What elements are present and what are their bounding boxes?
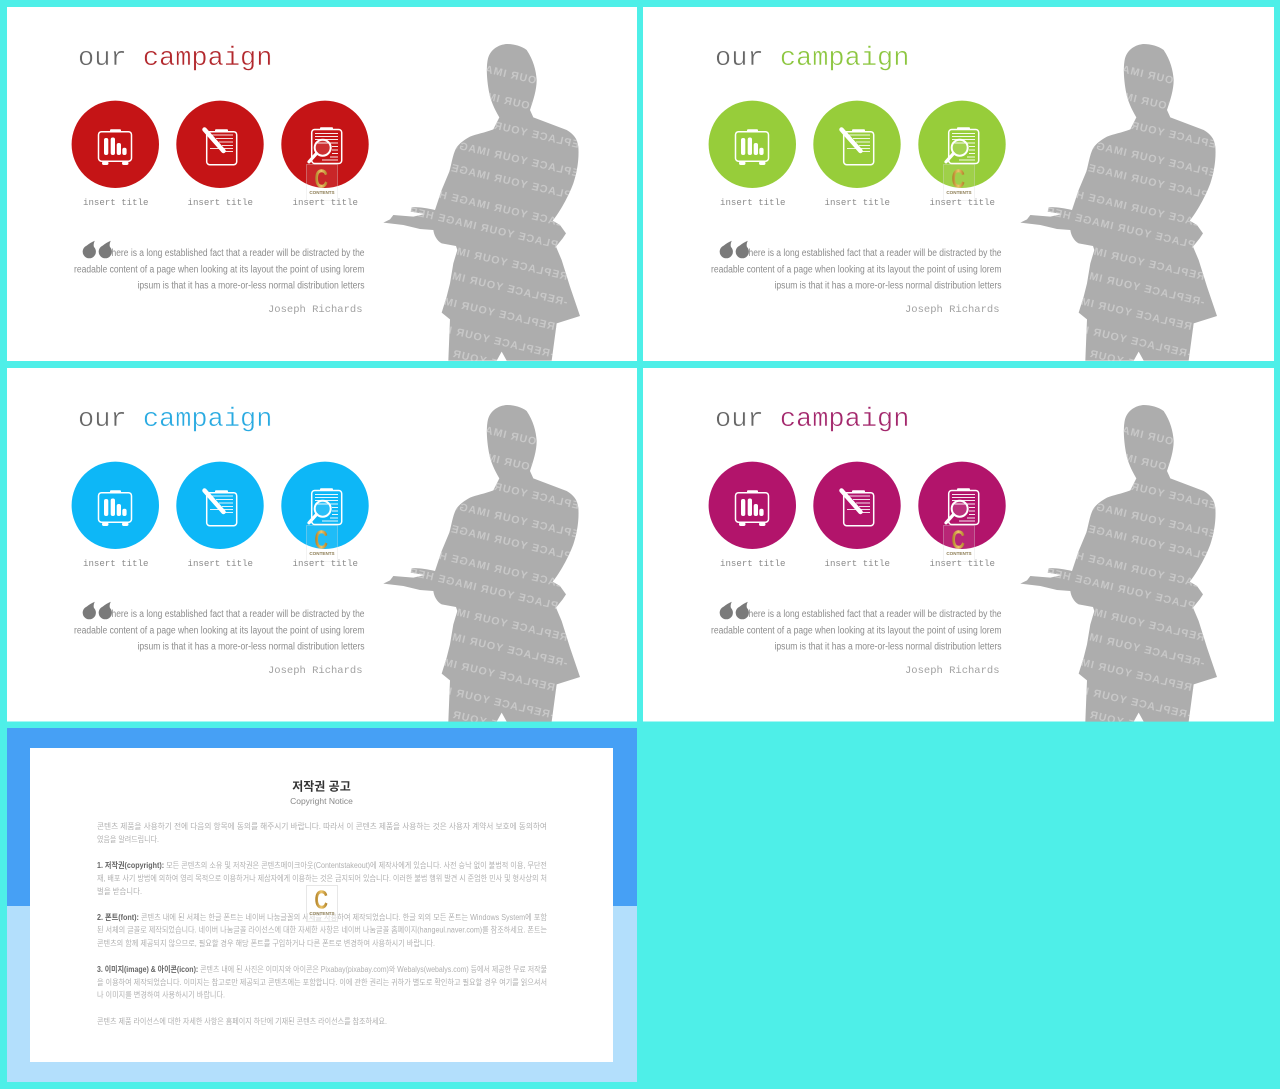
silhouette image placeholder: REPLACE YOUR IMAGE HERE	[1030, 592, 1206, 644]
icon: clipboard with pencil	[813, 101, 901, 188]
silhouette image placeholder: REPLACE YOUR IMAGE HERE	[1036, 564, 1212, 616]
section 1: copyright: 1. 저작권(copyright): 모든 콘텐츠의 소유 및 저작권은 콘텐츠메이크아웃(Contentstakeout)에 제작사에게 있습니다. 사전 승낙 없이 불법적 이용, 무단전	[97, 860, 547, 870]
icon: clipboard with magnifier	[918, 101, 1006, 188]
icon: clipboard with magnifier	[281, 462, 369, 549]
quote text	[74, 609, 365, 652]
icon: presentation board	[709, 462, 796, 549]
silhouette image placeholder: REPLACE YOUR IMAGE HERE	[1050, 154, 1226, 205]
title: our campaign	[715, 405, 909, 435]
copyright subheading: Copyright Notice	[290, 796, 353, 806]
silhouette image placeholder: -REPLACE YOUR IMAGE HERE	[1025, 617, 1206, 670]
title: our campaign	[78, 44, 272, 74]
quote author: Joseph Richards	[268, 304, 363, 316]
label: third insert title: insert title	[292, 197, 358, 208]
quote text: readable content of a page when looking at its layout the point of using lorem	[711, 626, 1002, 636]
watermark	[306, 884, 338, 922]
silhouette image placeholder: -REPLACE YOUR IMAGE HERE	[1017, 642, 1197, 695]
quote text: here is a long established fact that a reader will be distracted by the	[748, 609, 1002, 620]
quote text: ipsum is that it has a more-or-less normal distribution letters	[774, 280, 1002, 292]
watermark: CONTENTS	[309, 551, 335, 556]
label: first insert title: insert title	[83, 558, 148, 569]
intro paragraph: 였음을 알려드립니다.	[97, 834, 159, 844]
watermark: C	[314, 884, 328, 914]
silhouette image placeholder	[1020, 44, 1217, 361]
watermark: CONTENTS	[309, 190, 335, 195]
section 3: image and icon: 3. 이미지(image) & 아이콘(icon): 콘텐츠 내에 된 사진은 이미지와 아이콘은 Pixabay(pixabay.com)와 Webalys(webalys.com) 등에서 제공한 무료 저작물	[97, 964, 547, 974]
icon: quotation marks	[720, 602, 749, 619]
quote text	[74, 248, 365, 292]
label: third insert title: insert title	[930, 197, 995, 208]
silhouette image placeholder: REPLACE YOUR IMAGE HERE	[1066, 51, 1242, 103]
silhouette image placeholder: REPLACE YOUR IMAGE HERE	[1036, 203, 1212, 255]
section 2: font: 된 서체의 글꼴로 제작되었습니다. 네이버 나눔글꼴 라이선스에 대한 자세한 사항은 네이버 나눔글꼴 홈페이지(hangeul.naver.com)를 참조하세요. 폰트는	[97, 924, 547, 934]
section 2: font: 2. 폰트(font): 콘텐츠 내에 된 서체는 한글 폰트는 네이버 나눔글꼴의 서체를 사용하여 제작되었습니다. 한글 외의 모든 폰트는 Windows System에 포함	[97, 912, 548, 922]
icon: presentation board	[709, 101, 796, 188]
section 3: image and icon	[97, 964, 547, 1000]
watermark: CONTENTS	[309, 911, 335, 916]
label: first insert title: insert title	[83, 197, 148, 208]
silhouette image placeholder: REPLACE YOUR IMAGE HERE	[413, 101, 589, 153]
silhouette image placeholder: REPLACE YOUR IMAGE HERE	[1050, 183, 1226, 235]
silhouette image placeholder: REPLACE YOUR IMAGE HERE	[1050, 101, 1226, 153]
silhouette image placeholder: -REPLACE YOUR IMAGE HERE	[375, 308, 555, 361]
quote text: here is a long established fact that a reader will be distracted by the	[748, 248, 1002, 259]
section 1: copyright: 재, 배포 사기 방법에 의하여 영리 목적으로 이용하거나 제삼자에게 이용하는 것은 금지되어 있습니다. 이러한 불법 행위 발견 시 준엄한 민사 및 형사상의 처	[97, 873, 547, 883]
silhouette image placeholder: REPLACE YOUR IMAGE HERE	[1050, 544, 1226, 596]
silhouette image placeholder: REPLACE YOUR IMAGE HERE	[1050, 462, 1226, 514]
section 1: copyright	[97, 860, 547, 896]
watermark	[944, 163, 974, 200]
panel: red campaign slide	[7, 7, 637, 382]
title: our campaign	[715, 44, 909, 74]
silhouette image placeholder: -REPLACE YOUR IMAGE HERE	[1009, 330, 1189, 382]
quote author: Joseph Richards	[905, 304, 1000, 316]
section 3: image and icon: 을 이용하여 제작되었습니다. 이미지는 참고로만 제공되고 콘텐츠에는 포함합니다. 이에 관한 권리는 귀하가 별도로 확인하고 필요할 경우 여기를 읽으셔서	[97, 977, 547, 987]
silhouette image placeholder: -REPLACE YOUR IMAGE HERE	[388, 617, 569, 670]
label: third insert title: insert title	[930, 558, 995, 569]
silhouette image placeholder: -REPLACE YOUR IMAGE HERE	[380, 281, 560, 334]
silhouette image placeholder: REPLACE YOUR IMAGE HERE	[413, 462, 589, 514]
icon: quotation marks	[83, 602, 112, 619]
panel: blue campaign slide	[7, 368, 637, 743]
silhouette image placeholder: -REPLACE YOUR IMAGE HERE	[372, 691, 552, 743]
copyright heading: 저작권 공고	[292, 778, 351, 794]
silhouette image placeholder	[1020, 405, 1217, 722]
watermark: CONTENTS	[946, 190, 972, 195]
silhouette image placeholder: -REPLACE YOUR IMAGE HERE	[375, 669, 555, 722]
quote author: Joseph Richards	[268, 665, 363, 677]
label: third insert title: insert title	[292, 558, 358, 569]
icon: clipboard with magnifier	[281, 101, 369, 188]
silhouette image placeholder: -REPLACE YOUR IMAGE HERE	[1025, 256, 1206, 309]
silhouette image placeholder: REPLACE YOUR IMAGE HERE	[413, 491, 589, 543]
panel: green campaign slide	[643, 7, 1274, 382]
icon: clipboard with pencil	[176, 101, 264, 188]
label: second insert title: insert title	[824, 558, 890, 569]
icon: presentation board	[72, 462, 159, 549]
silhouette image placeholder: -REPLACE YOUR IMAGE HERE	[1017, 281, 1197, 334]
quote text: readable content of a page when looking at its layout the point of using lorem	[711, 264, 1002, 276]
watermark	[306, 524, 338, 562]
quote text	[711, 248, 1002, 292]
icon: clipboard with pencil	[813, 462, 901, 549]
silhouette image placeholder: REPLACE YOUR IMAGE HERE	[399, 203, 575, 255]
label: second insert title: insert title	[824, 197, 890, 208]
quote text: ipsum is that it has a more-or-less normal distribution letters	[774, 642, 1002, 652]
icon: quotation marks	[83, 241, 112, 258]
silhouette image placeholder: REPLACE YOUR IMAGE HERE	[413, 183, 589, 235]
silhouette image placeholder: REPLACE YOUR IMAGE HERE	[413, 154, 589, 205]
watermark: CONTENTS	[946, 551, 972, 556]
section 2: font: 콘텐츠의 함께 제공되지 않으므로, 필요할 경우 해당 폰트를 구입하거나 다른 폰트로 변경하여 사용하시기 바랍니다.	[97, 938, 435, 948]
panel: magenta campaign slide	[643, 368, 1274, 743]
icon: clipboard with pencil	[176, 462, 264, 549]
silhouette image placeholder: -REPLACE YOUR IMAGE HERE	[1012, 308, 1192, 361]
label: second insert title: insert title	[188, 558, 253, 569]
quote text: ipsum is that it has a more-or-less normal distribution letters	[138, 280, 364, 292]
silhouette image placeholder: REPLACE YOUR IMAGE HERE	[399, 564, 575, 616]
section 2: font	[97, 912, 548, 948]
section 3: image and icon: 나 이미지를 변경하여 사용하시기 바랍니다.	[97, 990, 225, 1000]
section 1: copyright: 벌을 받습니다.	[97, 886, 142, 896]
silhouette image placeholder: REPLACE YOUR IMAGE HERE	[1060, 76, 1236, 128]
silhouette image placeholder: -REPLACE YOUR IMAGE HERE	[372, 330, 552, 382]
silhouette image placeholder: REPLACE YOUR IMAGE HERE	[1050, 491, 1226, 543]
icon: quotation marks	[720, 241, 749, 258]
silhouette image placeholder: REPLACE YOUR IMAGE HERE	[423, 437, 599, 489]
silhouette image placeholder: REPLACE YOUR IMAGE HERE	[1066, 412, 1242, 464]
intro paragraph: 콘텐츠 제품을 사용하기 전에 다음의 항목에 동의를 해주시기 바랍니다. 따라서 이 콘텐츠 제품을 사용하는 것은 사용자 계약서 보호에 동의하여	[97, 821, 547, 831]
watermark	[944, 524, 974, 562]
quote text: ipsum is that it has a more-or-less normal distribution letters	[138, 642, 364, 652]
silhouette image placeholder: REPLACE YOUR IMAGE HERE	[429, 412, 605, 464]
label: first insert title: insert title	[720, 197, 786, 208]
silhouette image placeholder: REPLACE YOUR IMAGE HERE	[1030, 231, 1206, 283]
silhouette image placeholder: REPLACE YOUR IMAGE HERE	[413, 515, 589, 566]
silhouette image placeholder: REPLACE YOUR IMAGE HERE	[393, 592, 569, 644]
silhouette image placeholder: REPLACE YOUR IMAGE HERE	[1060, 437, 1236, 489]
silhouette image placeholder: REPLACE YOUR IMAGE HERE	[1050, 130, 1226, 182]
icon: clipboard with magnifier	[918, 462, 1006, 549]
quote text: here is a long established fact that a reader will be distracted by the	[112, 609, 365, 620]
intro paragraph	[97, 821, 547, 844]
icon: presentation board	[72, 101, 159, 188]
silhouette image placeholder: -REPLACE YOUR IMAGE HERE	[1012, 669, 1192, 722]
silhouette image placeholder: REPLACE YOUR IMAGE HERE	[423, 76, 599, 128]
panel: copyright notice	[7, 728, 637, 1082]
silhouette image placeholder: -REPLACE YOUR IMAGE HERE	[380, 642, 560, 695]
label: first insert title: insert title	[720, 558, 786, 569]
silhouette image placeholder: REPLACE YOUR IMAGE HERE	[413, 544, 589, 596]
silhouette image placeholder: -REPLACE YOUR IMAGE HERE	[1009, 691, 1189, 743]
quote author: Joseph Richards	[905, 665, 1000, 677]
quote text: readable content of a page when looking at its layout the point of using lorem	[74, 626, 364, 636]
silhouette image placeholder: REPLACE YOUR IMAGE HERE	[393, 231, 569, 283]
silhouette image placeholder: REPLACE YOUR IMAGE HERE	[413, 130, 589, 182]
silhouette image placeholder	[384, 44, 580, 361]
silhouette image placeholder: -REPLACE YOUR IMAGE HERE	[388, 256, 569, 309]
watermark: C	[952, 163, 965, 193]
quote text	[711, 609, 1002, 652]
watermark	[306, 163, 338, 200]
silhouette image placeholder: REPLACE YOUR IMAGE HERE	[429, 51, 605, 103]
quote text: readable content of a page when looking at its layout the point of using lorem	[74, 264, 364, 276]
watermark: C	[314, 163, 328, 193]
watermark: C	[314, 524, 328, 554]
quote text: here is a long established fact that a reader will be distracted by the	[112, 248, 365, 259]
silhouette image placeholder: REPLACE YOUR IMAGE HERE	[1050, 515, 1226, 566]
closing note: 콘텐츠 제품 라이선스에 대한 자세한 사항은 홈페이지 하단에 기재된 콘텐츠 라이선스를 참조하세요.	[97, 1016, 387, 1026]
title: our campaign	[78, 405, 272, 435]
watermark: C	[952, 524, 965, 554]
label: second insert title: insert title	[188, 197, 253, 208]
silhouette image placeholder	[384, 405, 580, 722]
